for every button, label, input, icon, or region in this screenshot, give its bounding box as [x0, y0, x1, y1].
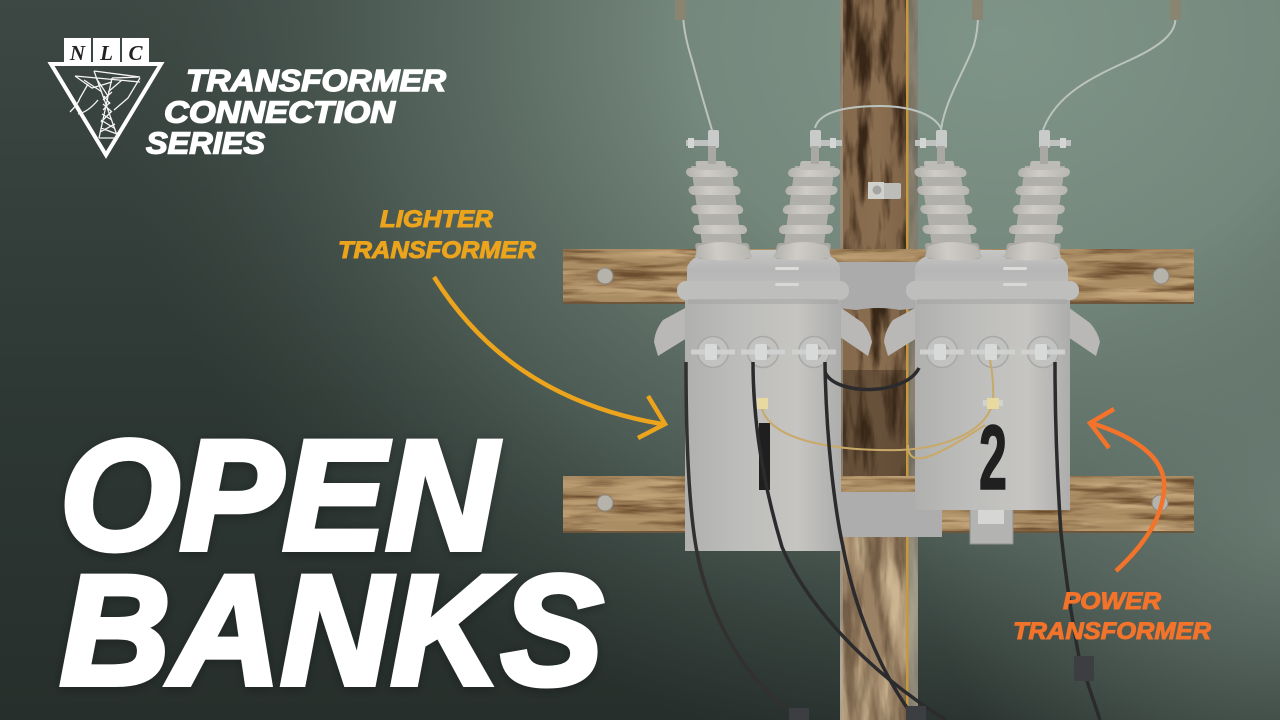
pole clamp: [868, 182, 901, 199]
label: lighter transformer: [338, 206, 537, 264]
series title: CONNECTION: [164, 94, 396, 130]
logo tower: [70, 71, 140, 138]
lower crossarm: [563, 476, 1194, 533]
lower mounting bracket: [840, 492, 1013, 544]
logo letter boxes: C: [128, 41, 143, 65]
top wire connectors: [675, 0, 1181, 20]
series title: SERIES: [146, 126, 265, 160]
logo: NLC triangle: [51, 38, 161, 155]
series title: [146, 63, 447, 160]
transformer 1: lighter: [677, 250, 849, 551]
primary wires: [683, 15, 1175, 130]
tank number 1: [759, 423, 770, 490]
tank number 2: 2: [979, 407, 1007, 509]
headline: [60, 409, 603, 718]
upper mounting bracket: [838, 262, 918, 310]
high-voltage insulators: [681, 161, 1075, 260]
label: power transformer: [1013, 588, 1212, 645]
utility pole: [840, 0, 918, 720]
transformer 2: power: [906, 250, 1079, 510]
thin yellow jumper wires: [761, 360, 993, 458]
arrow: to lighter transformer: [434, 277, 665, 438]
label: lighter transformer: LIGHTER: [380, 206, 494, 233]
logo letter boxes: N: [69, 41, 86, 65]
logo letter boxes: L: [99, 41, 113, 65]
yellow terminal blocks: [757, 398, 1003, 409]
cable connectors: [789, 656, 1094, 720]
headline: BANKS: [60, 544, 603, 718]
hanger fins: [654, 307, 1100, 356]
logo letter boxes: [64, 38, 149, 65]
insulator clamps: [686, 130, 1071, 164]
secondary bushings: [691, 336, 1065, 368]
black service cables: [686, 362, 1100, 720]
arrow: to power transformer: [1090, 409, 1164, 571]
label: lighter transformer: TRANSFORMER: [338, 237, 537, 264]
headline: OPEN: [60, 409, 500, 583]
series title: TRANSFORMER: [186, 63, 447, 98]
label: power transformer: POWER: [1063, 588, 1162, 615]
upper crossarm: [563, 249, 1194, 304]
label: power transformer: TRANSFORMER: [1013, 618, 1212, 645]
